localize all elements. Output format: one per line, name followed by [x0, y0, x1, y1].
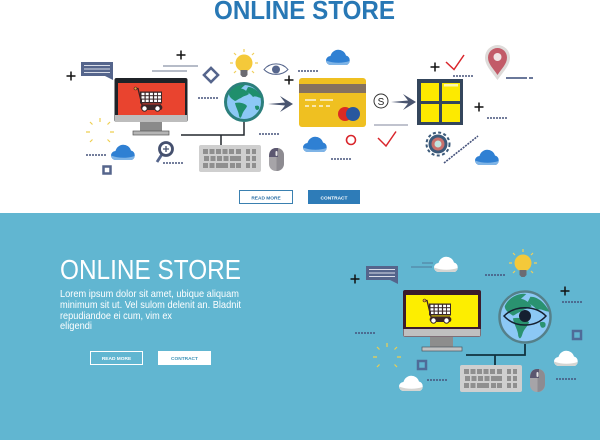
text block: lorem paragraph: repudiandoe ei cum, vim ex	[60, 310, 173, 322]
panel: banner illustration	[350, 249, 583, 392]
icon: square lower	[418, 361, 426, 369]
icon: plus near window right	[474, 102, 484, 112]
icon: blue cloud left	[111, 145, 136, 161]
icon: desktop monitor with cart	[114, 78, 188, 135]
icon: mouse	[269, 148, 284, 171]
white top background	[0, 0, 600, 213]
icon: plus above monitor	[176, 50, 186, 60]
icon: speech bubble	[81, 62, 113, 80]
dotted lines	[355, 275, 583, 380]
icon: diamond	[204, 68, 218, 82]
icon: white cloud top	[434, 257, 459, 273]
icon: red check upper	[446, 55, 464, 70]
arrow: globe to card	[268, 96, 293, 112]
icon: sparkle	[373, 343, 401, 367]
icon: location pin	[485, 45, 510, 80]
icon: red check lower	[378, 132, 396, 146]
button: read more top: READ MORE	[251, 195, 281, 201]
icon: keyboard	[199, 145, 261, 172]
divider line under arrow	[374, 124, 408, 126]
icon: dollar coin	[374, 94, 388, 108]
icon: blue cloud above card	[326, 50, 351, 66]
icon: square right	[573, 331, 581, 339]
motion lines	[411, 263, 433, 267]
button: read more top	[240, 190, 292, 204]
button: read more banner: READ MORE	[102, 356, 132, 362]
icon: globe	[226, 84, 262, 120]
connector cables	[181, 122, 244, 145]
icon: square	[104, 166, 110, 174]
button: contract top: CONTRACT	[321, 195, 348, 201]
icon: red ring	[346, 136, 356, 144]
button: contract top	[308, 190, 360, 204]
text block: lorem paragraph: eligendi	[60, 320, 92, 332]
icon: eye	[264, 64, 288, 74]
connector cables	[466, 344, 525, 365]
heading: online store banner: ONLINE STORE	[60, 254, 241, 285]
motion lines	[152, 66, 198, 71]
panel: top illustration	[66, 45, 533, 174]
button: contract banner	[158, 351, 211, 365]
text block: lorem paragraph: minimum sit ut. Vel sulom delenit an. Bladnit	[60, 299, 241, 311]
icon: white cloud right	[554, 351, 579, 367]
blue bottom panel background	[0, 213, 600, 440]
icon: plus near eye	[284, 76, 294, 84]
icon: plus right	[560, 286, 570, 296]
icon: light bulb	[509, 249, 537, 277]
icon: sparkle left	[86, 118, 114, 142]
text block: lorem paragraph: Lorem ipsum dolor sit amet, ubique aliquam	[60, 288, 239, 300]
icon: light bulb	[230, 49, 258, 77]
icon: globe with eye	[500, 292, 550, 342]
icon: desktop monitor with cart	[403, 290, 481, 351]
icon: credit card	[299, 78, 366, 127]
arrow: card to window	[391, 94, 416, 110]
icon: plus left	[66, 72, 76, 80]
icon: mouse	[530, 369, 545, 392]
diagonal dotted line	[444, 136, 478, 163]
dotted lines	[86, 71, 508, 163]
icon: gear	[426, 132, 450, 156]
icon: window grid	[417, 79, 463, 125]
text block: lorem paragraph	[60, 288, 241, 332]
button: contract banner: CONTRACT	[171, 356, 198, 362]
icon: keyboard	[460, 365, 522, 392]
icon: magnifier	[157, 142, 172, 162]
icon: blue cloud lower right	[475, 150, 500, 166]
pin ground line	[506, 77, 533, 79]
icon: dollar coin: S	[378, 97, 385, 108]
icon: plus left	[350, 274, 360, 284]
button: read more banner	[90, 352, 142, 364]
icon: speech bubble	[366, 266, 398, 284]
icon: white cloud lower	[399, 376, 424, 392]
icon: plus near window top	[430, 62, 440, 72]
icon: blue cloud below card	[303, 137, 328, 153]
